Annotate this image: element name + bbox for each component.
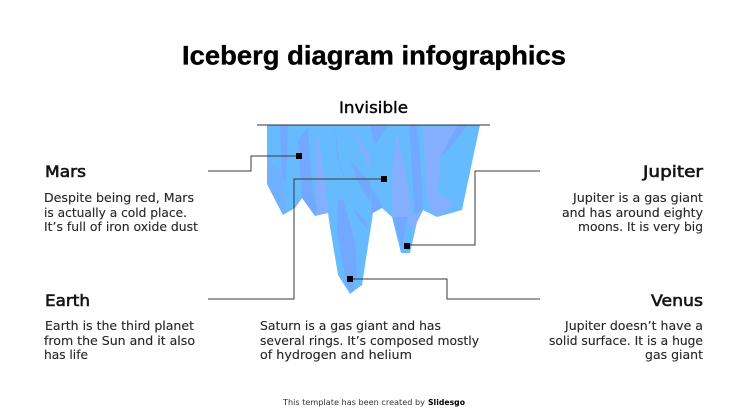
panel: Venus: Jupiter doesn’t have a: [564, 318, 703, 333]
footer credit: This template has been created by: [282, 398, 425, 407]
panel: Mars: Mars: [45, 162, 86, 181]
panel: Mars: [44, 162, 198, 234]
connector: Earth: [208, 176, 387, 299]
connector: Jupiter: [404, 171, 540, 249]
title: Iceberg diagram infographics: [182, 40, 566, 70]
panel: Earth: has life: [44, 347, 88, 362]
panel: Mars: It’s full of iron oxide dust: [44, 219, 198, 234]
panel: Venus: Venus: [651, 291, 703, 310]
connector: Mars: [208, 153, 302, 171]
panel: Earth: Earth is the third planet: [45, 318, 194, 333]
panel: Earth: [44, 291, 195, 362]
panel: Jupiter: Jupiter is a gas giant: [572, 190, 703, 205]
iceberg illustration: [267, 126, 480, 294]
panel: Earth: Earth: [45, 291, 90, 310]
panel: Saturn: of hydrogen and helium: [260, 347, 412, 362]
panel: Venus: solid surface. It is a huge: [549, 333, 703, 348]
panel: Jupiter: moons. It is very big: [578, 219, 703, 234]
panel: Jupiter: Jupiter: [642, 162, 703, 181]
panel: Venus: [549, 291, 703, 362]
panel: Saturn: Saturn is a gas giant and has: [260, 318, 441, 333]
panel: Saturn: several rings. It’s composed mostly: [260, 333, 479, 348]
panel: Mars: is actually a cold place.: [44, 205, 187, 220]
panel: Jupiter: and has around eighty: [562, 205, 703, 220]
connector: Venus: [347, 276, 540, 299]
footer credit: Slidesgo: [428, 398, 466, 407]
panel: Earth: from the Sun and it also: [44, 333, 195, 348]
panel: Saturn: [260, 318, 479, 362]
panel: Venus: gas giant: [645, 347, 703, 362]
panel: Mars: Despite being red, Mars: [44, 190, 194, 205]
waterline: [257, 124, 490, 126]
panel: Jupiter: [562, 162, 703, 234]
iceberg heading: Invisible: Invisible: [339, 98, 408, 117]
